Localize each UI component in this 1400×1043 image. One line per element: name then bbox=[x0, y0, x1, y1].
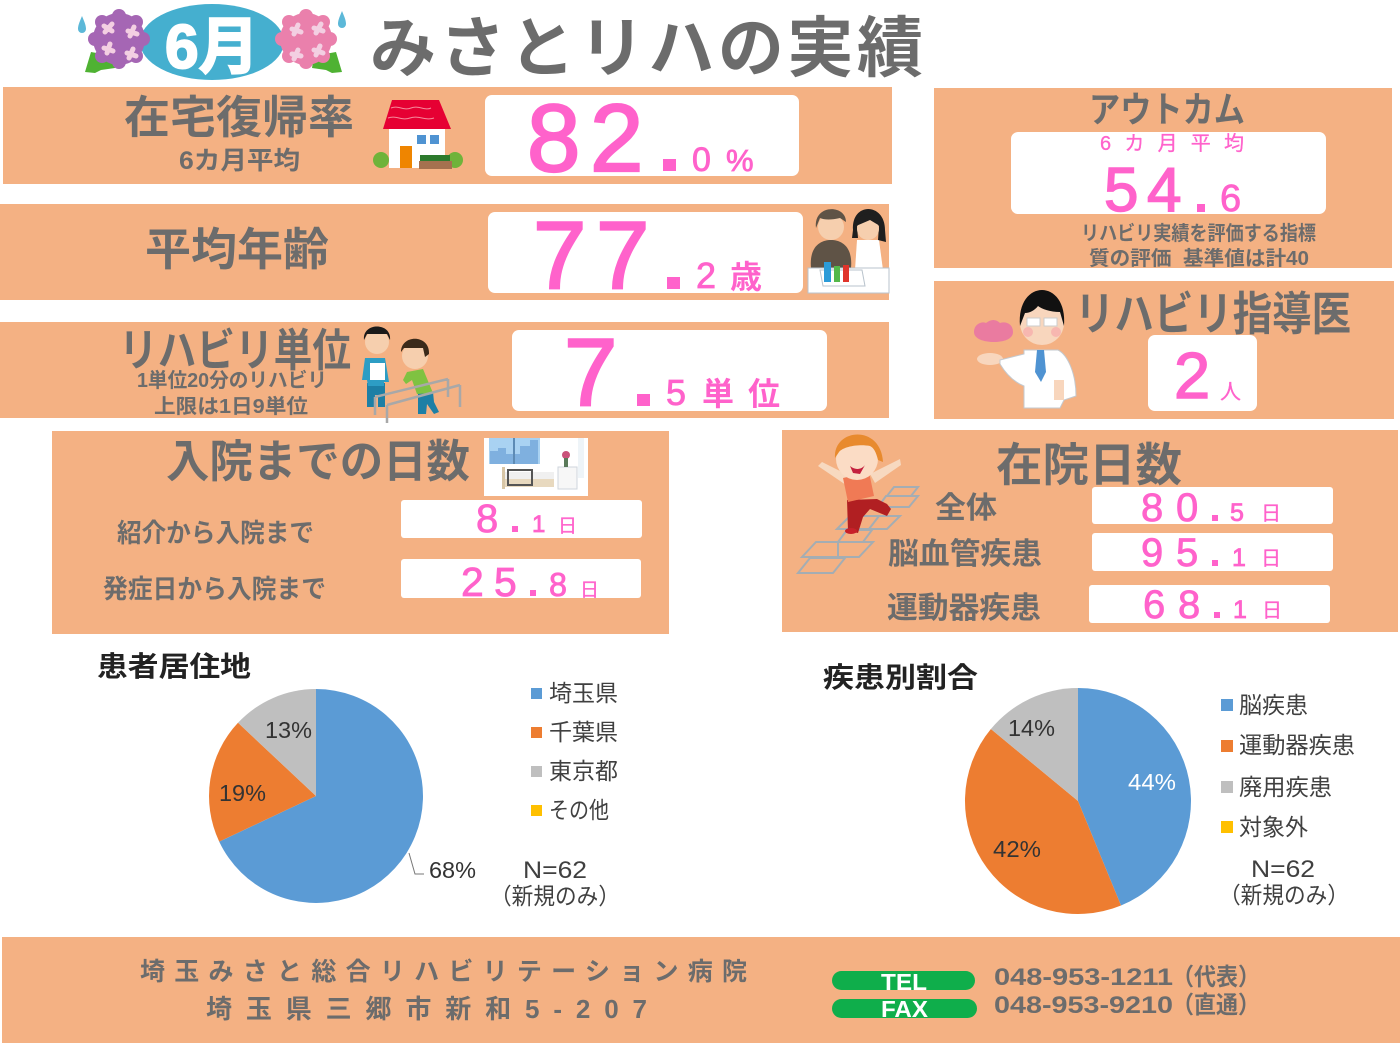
row: cerebrovascular: 脳血管疾患 bbox=[888, 538, 1042, 571]
label: FAX bbox=[832, 996, 977, 1022]
value: 7.5 units bbox=[564, 319, 780, 426]
value: 7.5 units: 単 bbox=[702, 376, 734, 412]
value: 82.0%: 8 bbox=[527, 85, 580, 192]
row: onset to admission: 日 bbox=[580, 580, 599, 601]
row: overall: 全体 bbox=[935, 492, 997, 525]
row: musculoskeletal: 1 bbox=[1233, 596, 1247, 624]
row: referral to admission bbox=[117, 497, 642, 548]
row: musculoskeletal bbox=[887, 583, 1330, 627]
header badge: June with hydrangeas bbox=[78, 4, 346, 82]
title: みさとリハの実績 bbox=[370, 11, 923, 85]
legend: residence: 東京都 bbox=[549, 758, 618, 784]
legend: residence: 千葉県 bbox=[549, 719, 618, 745]
value: 82.0%: % bbox=[726, 143, 754, 178]
pie chart: disease: 44% bbox=[1128, 769, 1176, 795]
label: TEL bbox=[832, 969, 975, 995]
row: musculoskeletal: 8 bbox=[1178, 583, 1200, 627]
row: overall: 5 bbox=[1230, 499, 1244, 527]
text: unit explanation: 上限は1日9単位 bbox=[154, 395, 308, 418]
pie chart: disease: 42% bbox=[993, 836, 1041, 862]
value: 54.6 bbox=[1104, 156, 1241, 225]
panel: length of stay bbox=[782, 430, 1398, 632]
row: cerebrovascular: 5 bbox=[1176, 531, 1198, 575]
pie chart: disease: 14% bbox=[1008, 715, 1055, 741]
row: referral to admission: 8 bbox=[476, 497, 498, 541]
value: 54.6: 5 bbox=[1104, 156, 1138, 225]
row: cerebrovascular: 9 bbox=[1141, 531, 1163, 575]
heading: outcome: アウトカム bbox=[1089, 89, 1245, 130]
note: sample size: （新規のみ） bbox=[490, 883, 620, 909]
pie chart: residence: 19% bbox=[219, 780, 266, 806]
icon: child playing hopscotch bbox=[798, 434, 918, 573]
value box bbox=[1148, 335, 1257, 411]
chart: patient residence bbox=[97, 651, 620, 909]
heading: patient residence: 患者居住地 bbox=[97, 651, 251, 682]
text: six month average: 6カ月平均 bbox=[179, 147, 300, 175]
value: 77.2 years bbox=[533, 202, 762, 309]
legend: residence: その他 bbox=[549, 797, 609, 823]
heading: average age: 平均年齢 bbox=[145, 224, 329, 275]
value: 2 people: 人 bbox=[1220, 381, 1241, 404]
row: overall: 8 bbox=[1141, 486, 1163, 530]
row: onset to admission: 2 bbox=[461, 559, 484, 605]
note: sample size bbox=[1219, 856, 1349, 908]
legend: disease: 運動器疾患 bbox=[1239, 732, 1355, 758]
heading: days until admission: 入院までの日数 bbox=[166, 436, 470, 487]
note: sample size: N=62 bbox=[1251, 856, 1315, 883]
row: referral to admission: 紹介から入院まで bbox=[117, 518, 314, 548]
value: 54.6: 4 bbox=[1147, 156, 1181, 225]
note: sample size bbox=[490, 857, 620, 909]
note: sample size: （新規のみ） bbox=[1219, 882, 1349, 908]
value box bbox=[1011, 132, 1326, 214]
icon: walking rehabilitation bbox=[362, 326, 460, 423]
panel: days until admission bbox=[52, 431, 669, 634]
row: onset to admission: 発症日から入院まで bbox=[103, 574, 326, 604]
text: fax number: （直通） bbox=[1172, 992, 1260, 1019]
row: musculoskeletal: 6 bbox=[1143, 583, 1165, 627]
legend: residence bbox=[531, 680, 618, 823]
value: 7.5 units: 7 bbox=[564, 319, 617, 426]
text: phone number bbox=[994, 964, 1260, 991]
text: fax number: 048-953-9210 bbox=[994, 992, 1173, 1019]
icon: patient and nurse at table bbox=[808, 209, 889, 293]
value: 54.6: 6 bbox=[1220, 178, 1241, 220]
heading: home return rate: 在宅復帰率 bbox=[124, 92, 354, 143]
row: referral to admission: 1 bbox=[532, 511, 545, 538]
row: overall: 日 bbox=[1261, 503, 1281, 525]
value box bbox=[488, 212, 803, 293]
icon: doctor holding brain bbox=[974, 290, 1076, 408]
legend: disease bbox=[1221, 692, 1355, 840]
text: unit explanation: 1単位20分のリハビリ bbox=[137, 369, 327, 392]
footer band bbox=[2, 937, 1400, 1043]
icon: hospital room bbox=[484, 438, 588, 496]
pie chart: residence: 13% bbox=[265, 717, 312, 743]
header badge: June with hydrangeas: 6月 bbox=[165, 13, 259, 82]
text: address: 埼玉県三郷市新和5-207 bbox=[206, 994, 647, 1024]
text: hospital name: 埼玉みさと総合リハビリテーション病院 bbox=[140, 958, 747, 986]
row: musculoskeletal: 日 bbox=[1262, 600, 1282, 622]
value: 82.0%: 2 bbox=[590, 85, 643, 192]
panel: rehab units bbox=[0, 319, 889, 426]
row: referral to admission: 日 bbox=[558, 516, 577, 537]
text: phone number: （代表） bbox=[1172, 964, 1260, 991]
text: unit explanation bbox=[137, 369, 327, 418]
legend: disease: 廃用疾患 bbox=[1239, 774, 1332, 800]
row: cerebrovascular: 日 bbox=[1261, 548, 1281, 570]
pie chart: disease bbox=[965, 688, 1191, 914]
legend: residence: 埼玉県 bbox=[549, 680, 618, 706]
row: onset to admission: 5 bbox=[494, 559, 517, 605]
row: musculoskeletal: 運動器疾患 bbox=[887, 592, 1041, 625]
value: 77.2 years: 7 bbox=[596, 202, 649, 309]
icon: house bbox=[373, 100, 463, 169]
label: FAX: FAX bbox=[881, 996, 929, 1022]
row: onset to admission bbox=[103, 559, 641, 605]
value: 77.2 years: 7 bbox=[533, 202, 586, 309]
chart: disease breakdown bbox=[823, 662, 1355, 914]
heading: length of stay: 在院日数 bbox=[996, 439, 1182, 491]
panel: outcome bbox=[934, 88, 1392, 270]
pie chart: residence: 68% bbox=[429, 857, 476, 883]
row: cerebrovascular bbox=[888, 531, 1333, 575]
panel: average age bbox=[0, 202, 889, 309]
text: outcome description bbox=[1081, 222, 1316, 270]
value: 82.0%: 0 bbox=[692, 141, 711, 179]
value: 77.2 years: 歳 bbox=[730, 259, 762, 295]
text: outcome description: リハビリ実績を評価する指標 bbox=[1081, 222, 1316, 245]
heading: rehab specialist: リハビリ指導医 bbox=[1075, 288, 1351, 340]
text: six month average: 6 カ 月 平 均 bbox=[1100, 132, 1244, 155]
text: phone number: 048-953-1211 bbox=[994, 964, 1173, 991]
value: 82.0% bbox=[527, 85, 754, 192]
panel: home return rate bbox=[3, 85, 892, 192]
heading: disease breakdown: 疾患別割合 bbox=[823, 662, 978, 693]
legend: disease: 脳疾患 bbox=[1239, 692, 1308, 718]
row: overall: 0 bbox=[1176, 486, 1198, 530]
text: fax number bbox=[994, 992, 1260, 1019]
value: 7.5 units: 5 bbox=[666, 372, 686, 413]
value: 7.5 units: 位 bbox=[748, 376, 780, 412]
panel: rehab specialist bbox=[934, 281, 1394, 419]
row: cerebrovascular: 1 bbox=[1232, 544, 1246, 572]
value: 2 people: 2 bbox=[1174, 339, 1210, 412]
value: 77.2 years: 2 bbox=[696, 255, 716, 296]
row: onset to admission: 8 bbox=[549, 566, 567, 603]
note: sample size: N=62 bbox=[523, 857, 587, 884]
value: 2 people bbox=[1174, 339, 1241, 412]
heading: rehab units: リハビリ単位 bbox=[119, 325, 351, 376]
value box bbox=[485, 95, 799, 176]
value box bbox=[512, 330, 827, 411]
row: overall bbox=[935, 486, 1333, 530]
label: TEL: TEL bbox=[881, 969, 927, 995]
pie chart: residence bbox=[209, 689, 476, 903]
legend: disease: 対象外 bbox=[1239, 814, 1308, 840]
text: outcome description: 質の評価 基準値は計40 bbox=[1089, 247, 1309, 270]
